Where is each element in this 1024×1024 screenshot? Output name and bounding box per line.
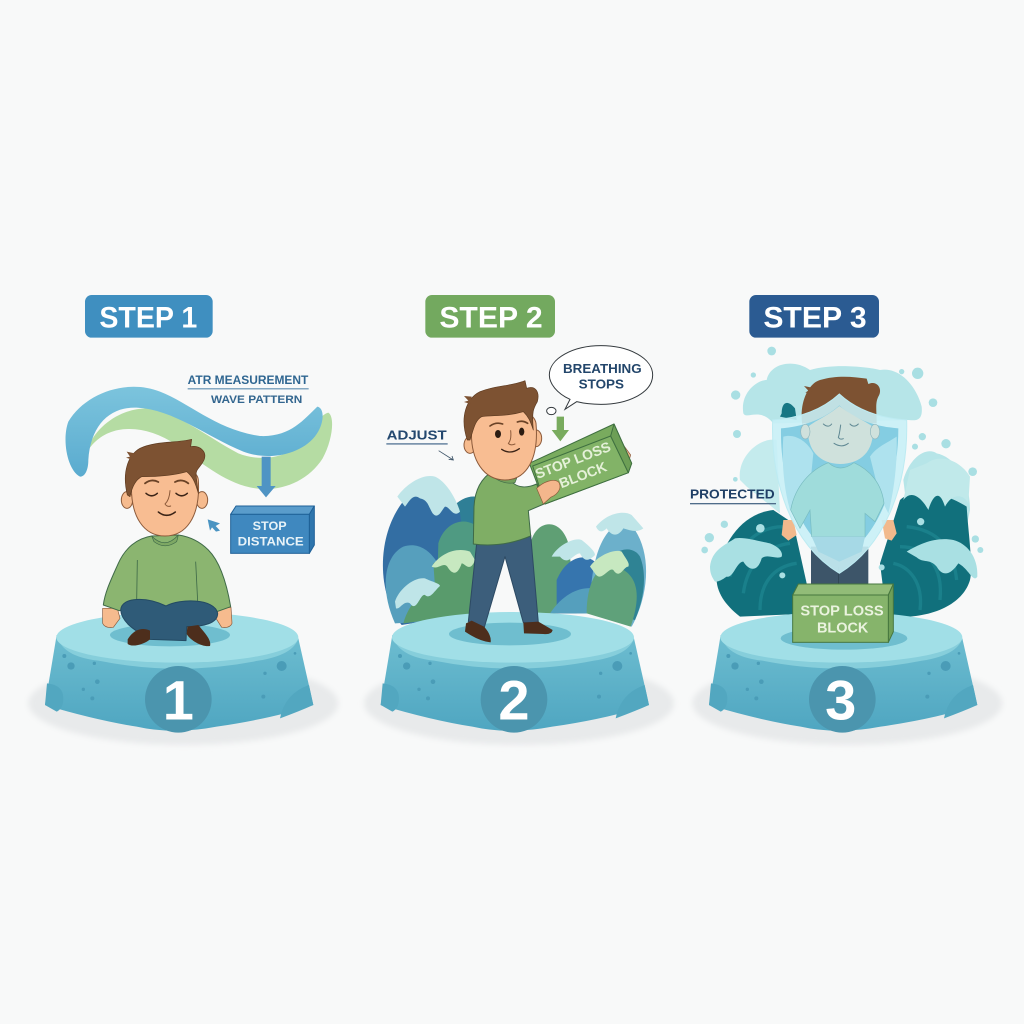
stop distance block [231, 506, 314, 553]
panel: step 2 [364, 295, 674, 745]
stop loss block in hands: STOP LOSS [533, 438, 613, 482]
heading badge: step 1: STEP 1 [99, 301, 197, 334]
stop distance block: STOP [253, 519, 287, 533]
heading badge: step 2: STEP 2 [439, 301, 543, 334]
icon: pointer arrow [208, 519, 220, 532]
arrow: adjust pointer [439, 451, 453, 460]
shield [773, 394, 907, 573]
speech bubble: breathing stops: BREATHING [563, 361, 642, 376]
panel: step 1 [28, 295, 338, 745]
platform 1: 1 [163, 668, 194, 731]
heading badge: step 3: STEP 3 [763, 301, 867, 334]
stop distance block: DISTANCE [238, 534, 304, 548]
arrow: green down [552, 417, 569, 441]
stop loss block: STOP LOSS [800, 603, 884, 619]
heading badge: step 3 [749, 295, 879, 338]
person meditating [103, 439, 232, 646]
platform 2: 2 [498, 668, 530, 731]
thought dot [547, 407, 556, 415]
platform 3 [692, 612, 1002, 745]
label: wave pattern: WAVE PATTERN [211, 394, 302, 406]
platform 1 [28, 612, 338, 745]
arrow: down to stop distance [257, 457, 276, 497]
panel: step 3 [690, 295, 1002, 745]
stop loss block: BLOCK [817, 621, 869, 637]
mountains and waves [383, 476, 646, 627]
label: protected: PROTECTED [690, 488, 775, 502]
label: ATR measurement: ATR MEASUREMENT [188, 374, 308, 387]
stop loss block [793, 584, 893, 642]
stop loss block in hands [529, 424, 632, 504]
spray and waves [701, 347, 983, 617]
person holding block [449, 381, 632, 645]
heading badge: step 1 [85, 295, 213, 338]
stop loss block in hands: BLOCK [557, 458, 609, 491]
heading badge: step 2 [425, 295, 555, 338]
platform 3: 3 [825, 668, 856, 731]
platform 2 [364, 612, 674, 745]
speech bubble: breathing stops [549, 346, 653, 409]
speech bubble: breathing stops: STOPS [579, 377, 624, 392]
label: adjust: ADJUST [387, 427, 447, 442]
wave pattern [66, 387, 332, 489]
person behind shield [782, 377, 897, 585]
